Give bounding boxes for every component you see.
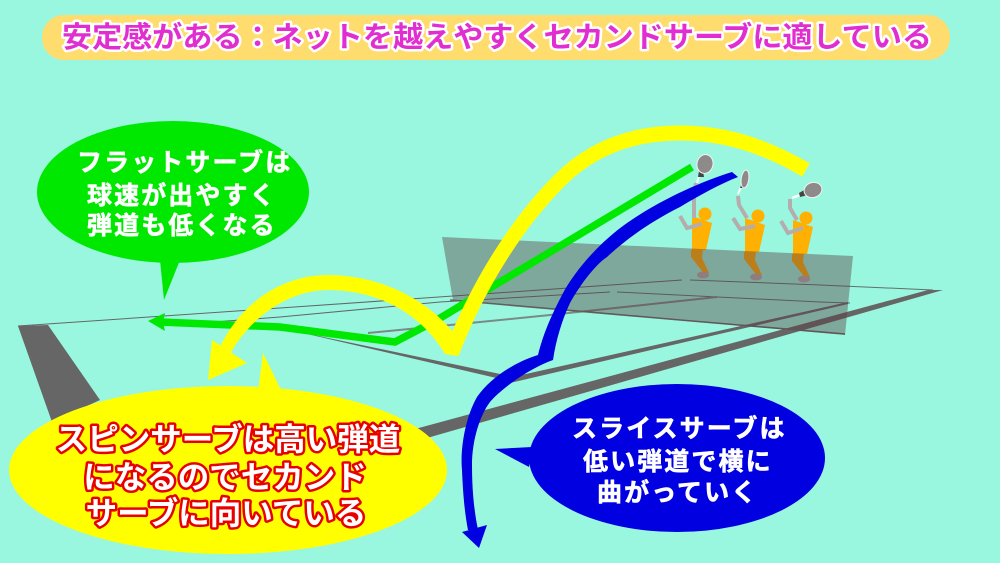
- callout: slice serve: 低い弾道で横に: [583, 448, 773, 476]
- callout: spin serve: スピンサーブは高い弾道: [56, 421, 400, 457]
- callout: flat serve: フラットサーブは: [77, 148, 292, 177]
- tennis court lines: [18, 280, 943, 440]
- callout: slice serve: スライスサーブは: [572, 414, 787, 443]
- callout: flat serve: [37, 121, 309, 300]
- callout: flat serve: 弾道も低くなる: [87, 212, 277, 240]
- arrow: slice serve trajectory: [462, 172, 738, 548]
- callout: spin serve: になるのでセカンド: [83, 459, 367, 495]
- arrow: flat serve trajectory: [148, 167, 692, 342]
- player: second server: [733, 170, 765, 280]
- player: first server: [680, 153, 715, 278]
- callout: spin serve: [9, 353, 447, 554]
- title banner: [42, 15, 950, 60]
- callout: spin serve: サーブに向いている: [86, 495, 366, 531]
- callout: slice serve: [495, 384, 825, 532]
- callout: flat serve: 球速が出やすく: [87, 181, 277, 210]
- title text: 安定感がある：ネットを越えやすくセカンドサーブに適している: [62, 20, 932, 54]
- callout: slice serve: 曲がっていく: [597, 478, 758, 507]
- player: third server: [781, 180, 824, 282]
- tennis net: [442, 237, 853, 335]
- arrow: spin serve trajectory: [208, 133, 806, 380]
